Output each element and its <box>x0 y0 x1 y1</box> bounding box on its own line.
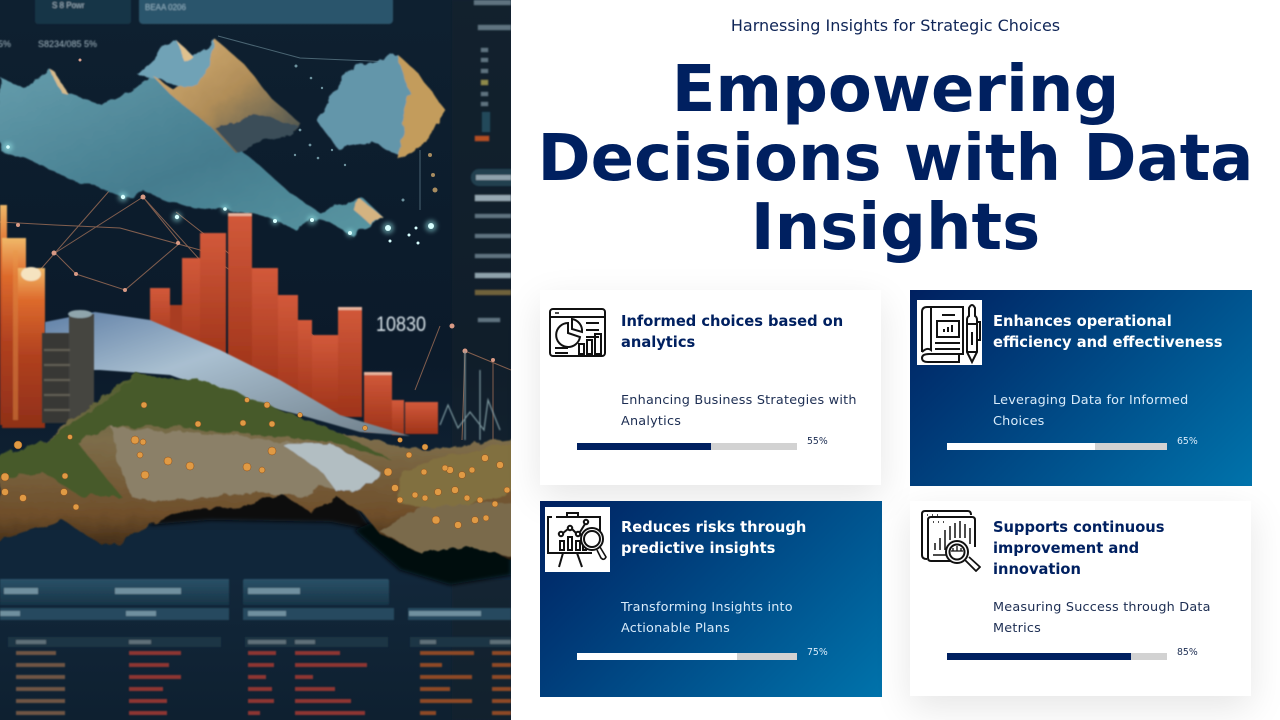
panel: informed choices <box>540 290 881 485</box>
right dashboard column <box>452 0 521 720</box>
water and shore shadow <box>0 530 511 580</box>
heading <box>993 313 1222 351</box>
mountains <box>0 39 445 235</box>
progress bar 75% <box>577 653 797 660</box>
top dashboard panels: BEAA 0206 <box>145 3 186 12</box>
heading: innovation <box>993 561 1081 578</box>
network lines <box>0 36 511 450</box>
glowing nodes <box>3 142 495 362</box>
progress bar 55% <box>577 443 797 450</box>
description <box>993 600 1211 636</box>
title: Insights <box>751 191 1040 265</box>
heading <box>621 519 806 557</box>
heading: predictive insights <box>621 540 775 557</box>
value 65%: 65% <box>1177 436 1198 447</box>
value 85%: 85% <box>1177 647 1198 658</box>
land map <box>0 374 516 562</box>
heading: Enhances operational <box>993 313 1172 330</box>
stone cylinders <box>42 310 94 423</box>
orange towers <box>0 205 45 428</box>
title: Decisions with Data <box>538 122 1253 196</box>
heading: Supports continuous <box>993 519 1164 536</box>
top dashboard panels <box>0 0 393 49</box>
scattered particles <box>78 58 438 202</box>
heading: improvement and <box>993 540 1139 557</box>
heading: analytics <box>621 334 695 351</box>
heading: efficiency and effectiveness <box>993 334 1222 351</box>
description: Choices <box>993 414 1045 429</box>
subtitle: Harnessing Insights for Strategic Choices <box>731 16 1060 35</box>
description: Transforming Insights into <box>621 600 793 615</box>
orange map markers <box>1 398 510 528</box>
red bar chart <box>150 213 438 435</box>
description <box>993 393 1188 429</box>
description: Metrics <box>993 621 1041 636</box>
icon: chart windows with magnifier <box>921 510 981 572</box>
value 55%: 55% <box>807 436 828 447</box>
ribbon <box>45 312 410 436</box>
description: Actionable Plans <box>621 621 730 636</box>
progress bar 65% <box>947 443 1167 450</box>
heading <box>993 519 1164 578</box>
title: Empowering <box>672 53 1119 127</box>
description <box>620 600 793 636</box>
description <box>621 393 857 429</box>
panel: continuous improvement <box>910 501 1251 696</box>
panel: operational efficiency <box>910 290 1252 486</box>
icon: presentation board with magnifier <box>545 507 610 572</box>
description: Enhancing Business Strategies with <box>621 393 857 408</box>
heading: Reduces risks through <box>621 519 806 536</box>
heading: Informed choices based on <box>621 313 843 330</box>
icon: report book and pen <box>917 300 982 365</box>
description: Leveraging Data for Informed <box>993 393 1188 408</box>
white line chart at right <box>440 351 500 440</box>
title <box>538 53 1253 265</box>
heading <box>621 313 843 351</box>
value 75%: 75% <box>807 647 828 658</box>
description: Measuring Success through Data <box>993 600 1211 615</box>
data tables <box>0 579 511 715</box>
icon: analytics dashboard window <box>549 308 606 357</box>
metric label: 10830 <box>376 313 426 336</box>
progress bar 85% <box>947 653 1167 660</box>
description: Analytics <box>621 414 681 429</box>
top dashboard panels: S8234/085 5% <box>38 39 97 49</box>
top dashboard panels: S 8 Powr <box>52 1 85 10</box>
hero image: data landscape <box>0 0 511 720</box>
panel: reduces risks <box>540 501 882 697</box>
